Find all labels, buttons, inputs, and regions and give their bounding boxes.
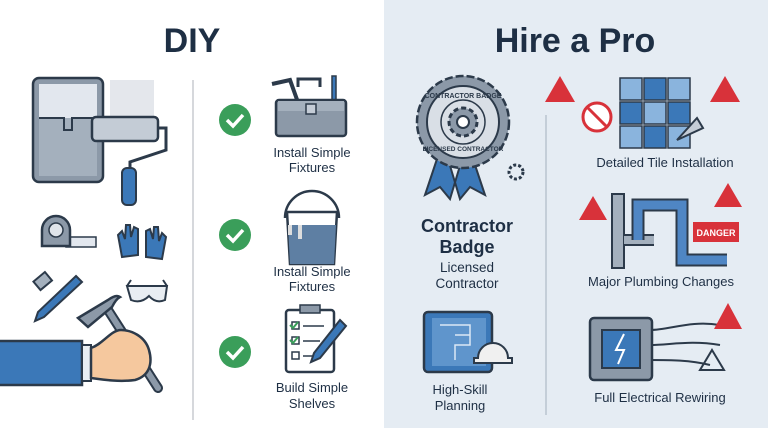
text: Licensed Contractor: Contractor — [435, 276, 499, 291]
text: Detailed Tile Installation: Detailed Tile Installation — [596, 155, 734, 170]
text: Licensed Contractor: Licensed — [440, 260, 494, 275]
icon: pipes with danger sign: DANGER — [696, 228, 736, 238]
text: Contractor Badge: Badge — [439, 237, 495, 257]
text: Install Simple Fixtures 2: Fixtures — [289, 279, 336, 294]
icon: gloves — [118, 225, 166, 259]
icon: contractor badge: LICENSED CONTRACTOR — [423, 146, 504, 153]
icon: blueprint and hard hat — [424, 312, 512, 372]
icon: pipes with danger sign — [579, 183, 742, 268]
icon: contractor badge — [417, 76, 523, 199]
checkmark 1 — [219, 104, 251, 136]
checkmark 2 — [219, 219, 251, 251]
icon: safety goggles — [127, 280, 167, 301]
icon: contractor badge: CONTRACTOR BADGE — [425, 93, 502, 100]
title: Hire a Pro: Hire a Pro — [495, 22, 655, 60]
icon: tape measure — [42, 216, 96, 247]
text: Full Electrical Rewiring: Full Electrical Rewiring — [594, 390, 726, 405]
text: Build Simple Shelves: Shelves — [289, 396, 336, 411]
text: Install Simple Fixtures 1: Install Simple — [273, 145, 351, 160]
text: High-Skill Planning: Planning — [435, 398, 485, 413]
icon: checklist clipboard with pencil — [286, 305, 346, 372]
icon: pencil and eraser — [33, 272, 82, 321]
text: High-Skill Planning: High-Skill — [433, 382, 488, 397]
checkmark 3 — [219, 336, 251, 368]
text: Install Simple Fixtures 2: Install Simple — [273, 264, 351, 279]
text: Contractor Badge: Contractor — [421, 216, 513, 236]
icon: hand holding hammer — [0, 296, 158, 388]
text: Major Plumbing Changes: Major Plumbing Changes — [588, 274, 734, 289]
icon: paint tray and roller — [33, 78, 166, 205]
icon: tile grid with warnings — [545, 76, 740, 148]
title: DIY: DIY — [164, 22, 221, 60]
icon: electrical panel with warnings — [590, 303, 742, 380]
icon: toolbox — [272, 76, 346, 136]
text: Build Simple Shelves: Build Simple — [276, 380, 348, 395]
text: Install Simple Fixtures 1: Fixtures — [289, 160, 336, 175]
icon: paint bucket — [285, 191, 339, 264]
